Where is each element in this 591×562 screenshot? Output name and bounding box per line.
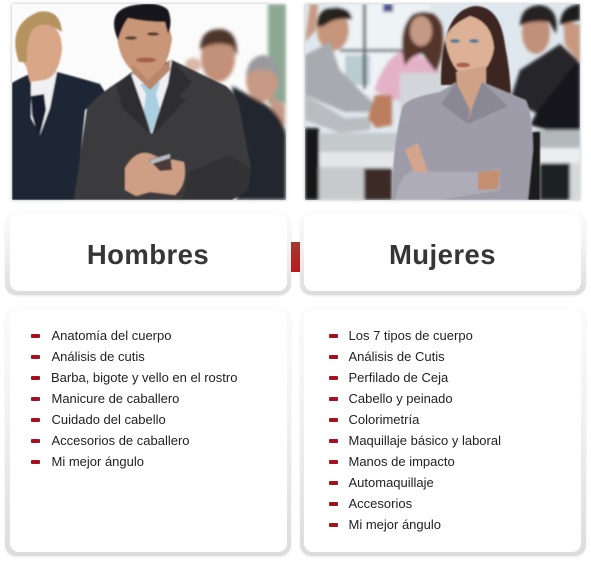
panel: Mujeres list: Cabello y peinado (348, 391, 453, 406)
connector between headings (291, 242, 300, 272)
heading: Mujeres: Mujeres (389, 239, 496, 270)
panel: Mujeres list: Perfilado de Ceja (348, 370, 448, 385)
panel: Mujeres list: Automaquillaje (348, 475, 434, 490)
panel: Mujeres list: Los 7 tipos de cuerpo (348, 328, 473, 343)
photo: businessmen (12, 4, 286, 200)
panel: Hombres list: Manicure de caballero (52, 391, 179, 406)
panel: Mujeres list: Mi mejor ángulo (348, 517, 441, 532)
heading: Hombres: Hombres (87, 239, 209, 270)
panel: Hombres list: Accesorios de caballero (52, 433, 190, 448)
panel: Mujeres list: Colorimetría (348, 412, 419, 427)
panel: Mujeres list: Maquillaje básico y laboral (348, 433, 501, 448)
photo: businesswomen (305, 4, 580, 200)
card: Hombres heading (5, 212, 291, 295)
panel: Mujeres list (300, 308, 586, 556)
panel: Mujeres list: Manos de impacto (348, 454, 455, 469)
panel: Mujeres list: Análisis de Cutis (348, 349, 445, 364)
panel: Hombres list: Anatomía del cuerpo (52, 328, 171, 343)
panel: Hombres list: Barba, bigote y vello en el rostro (51, 370, 237, 385)
panel: Hombres list: Mi mejor ángulo (52, 454, 144, 469)
panel: Hombres list: Análisis de cutis (52, 349, 145, 364)
panel: Hombres list (5, 308, 291, 556)
panel: Mujeres list: Accesorios (348, 496, 412, 511)
panel: Hombres list: Cuidado del cabello (52, 412, 166, 427)
card: Mujeres heading (300, 212, 586, 295)
